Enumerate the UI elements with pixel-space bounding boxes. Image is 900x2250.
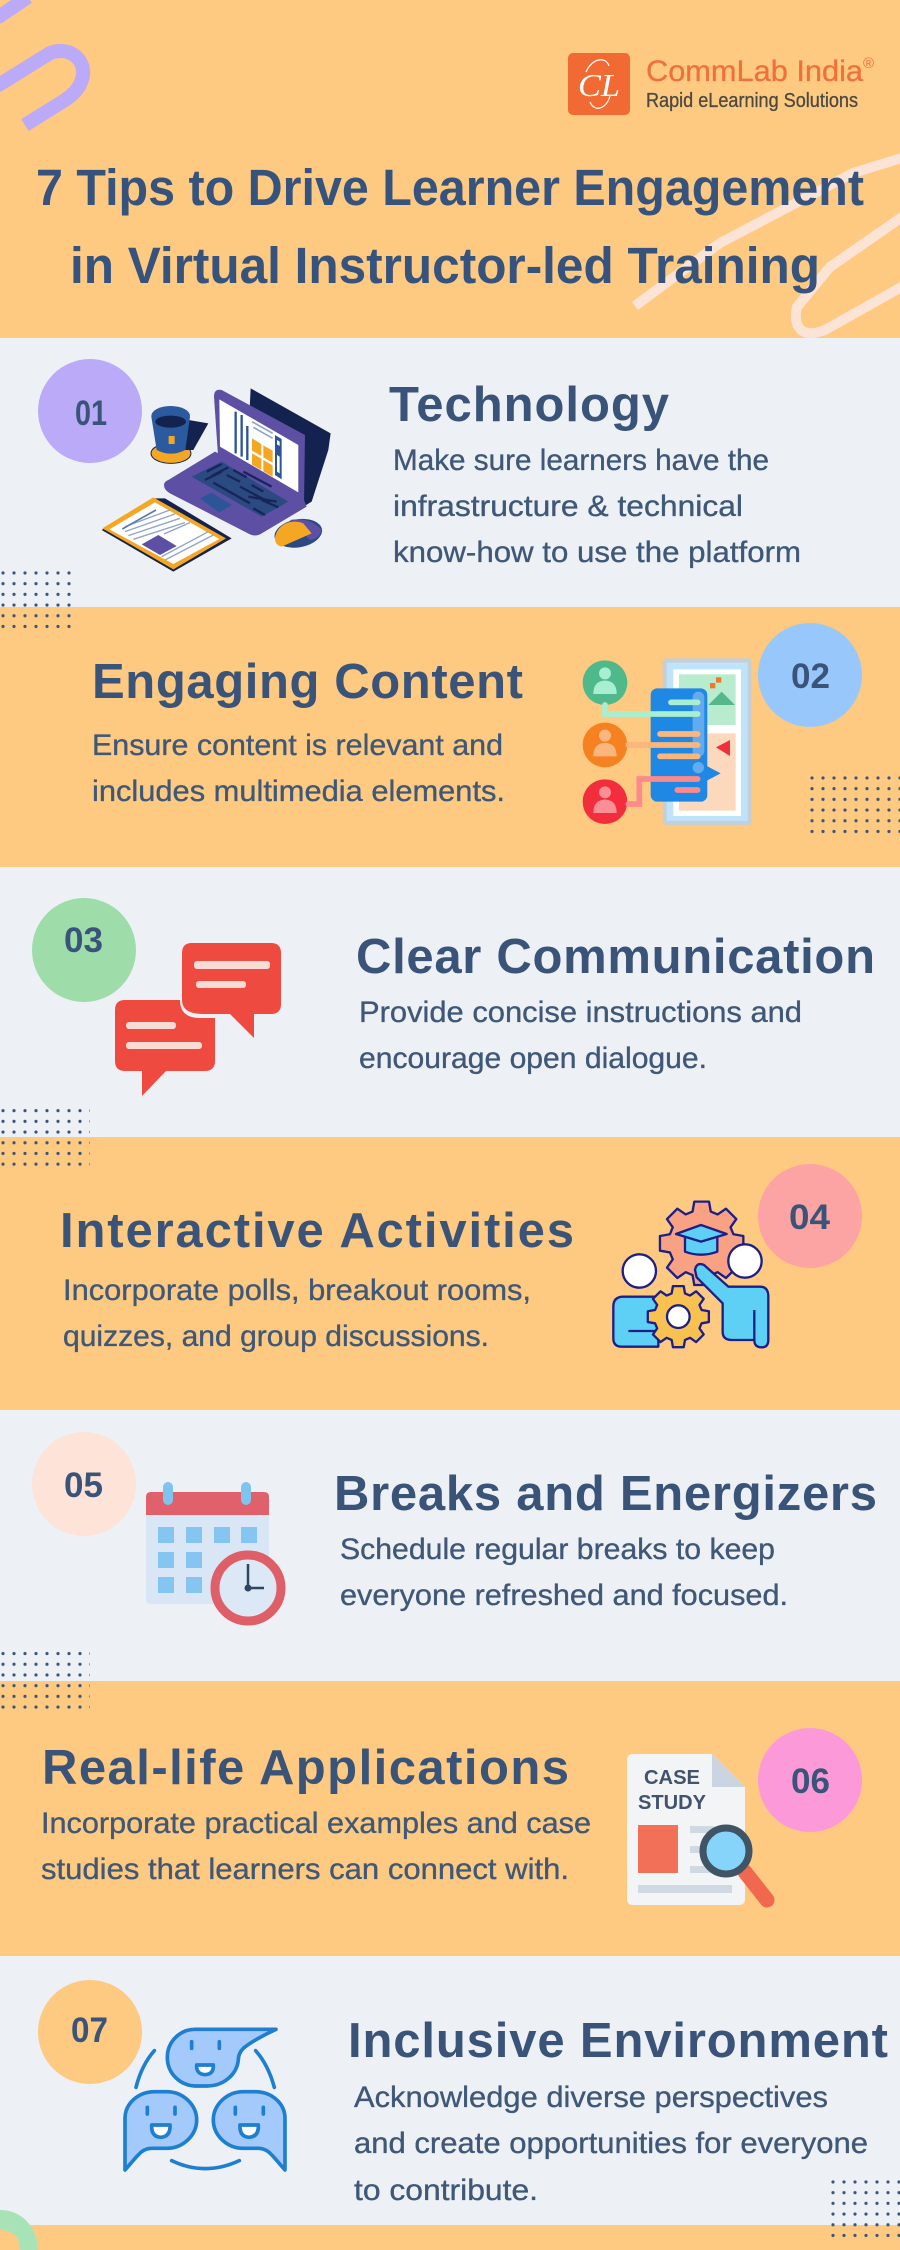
number badge 04 xyxy=(758,1164,862,1268)
panel: 02 Engaging Content xyxy=(0,607,900,867)
text block: Technology: Make sure learners have the xyxy=(393,444,769,477)
text block: Technology: Technology xyxy=(389,378,669,432)
panel: 06 Real-life Applications xyxy=(0,1681,900,1956)
logo: CommLab India: CL xyxy=(578,67,620,103)
icon: content on screen with users xyxy=(583,658,752,825)
number badge 03 xyxy=(32,898,136,1002)
icon: laptop, cup and tablet xyxy=(102,388,331,572)
text block: Inclusive Environment: to contribute. xyxy=(354,2174,538,2207)
number badge 01: 01 xyxy=(75,394,107,433)
text block: Engaging Content: Ensure content is relevant and xyxy=(92,729,503,762)
number badge 02 xyxy=(758,623,862,727)
text block: Real-life Applications: Real-life Applications xyxy=(42,1741,569,1795)
decorative purple squiggle xyxy=(0,0,83,125)
text block: Real-life Applications: Incorporate practical examples and case xyxy=(41,1807,591,1840)
text block: Engaging Content: Engaging Content xyxy=(92,655,523,709)
text block: Breaks and Energizers: Breaks and Energizers xyxy=(334,1467,877,1521)
number badge 06 xyxy=(758,1728,862,1832)
panel: 05 Breaks and Energizers xyxy=(0,1410,900,1681)
logo: CommLab India xyxy=(568,53,874,115)
icon: speech bubbles xyxy=(115,943,281,1096)
panel: 04 Interactive Activities xyxy=(0,1137,900,1410)
text block: Inclusive Environment: Acknowledge diverse perspectives xyxy=(354,2081,828,2114)
text block: Engaging Content: includes multimedia elements. xyxy=(92,775,505,808)
header panel xyxy=(0,0,900,338)
logo: CommLab India: CommLab India xyxy=(646,55,863,88)
number badge 07: 07 xyxy=(71,2011,108,2050)
text block: Interactive Activities: quizzes, and group discussions. xyxy=(63,1320,489,1353)
text block: Interactive Activities: Incorporate polls, breakout rooms, xyxy=(63,1274,531,1307)
panel: 01 Technology xyxy=(0,338,900,607)
icon: people with gears and graduation cap xyxy=(613,1202,768,1347)
text block: Inclusive Environment: Inclusive Environment xyxy=(348,2014,888,2068)
decorative pale squiggle xyxy=(635,157,900,333)
title: in Virtual Instructor-led Training xyxy=(70,237,820,294)
number badge 02: 02 xyxy=(791,657,830,696)
text block: Interactive Activities: Interactive Activities xyxy=(60,1204,574,1258)
title: 7 Tips to Drive Learner Engagement xyxy=(36,159,864,216)
text block: Technology xyxy=(389,378,801,569)
number badge 05 xyxy=(32,1432,136,1536)
decorative green corner arc xyxy=(0,2210,38,2250)
number badge 06: 06 xyxy=(791,1762,830,1801)
text block: Breaks and Energizers xyxy=(334,1467,877,1612)
icon: case study document with magnifier: CASE xyxy=(644,1767,700,1789)
title xyxy=(36,159,864,294)
text block: Real-life Applications xyxy=(41,1741,591,1886)
icon: case study document with magnifier: STUDY xyxy=(638,1792,707,1814)
number badge 04: 04 xyxy=(789,1198,831,1237)
number badge 05: 05 xyxy=(64,1466,103,1505)
footer band xyxy=(0,2225,900,2250)
text block: Inclusive Environment: and create opportunities for everyone xyxy=(354,2127,868,2160)
text block: Breaks and Energizers: Schedule regular breaks to keep xyxy=(340,1533,775,1566)
text block: Clear Communication xyxy=(356,930,875,1075)
number badge 01 xyxy=(38,359,142,463)
logo: CommLab India: Rapid eLearning Solutions xyxy=(646,90,858,112)
text block: Clear Communication: encourage open dialogue. xyxy=(359,1042,707,1075)
panel: 03 Clear Communication xyxy=(0,867,900,1137)
icon: case study document with magnifier xyxy=(627,1754,767,1905)
text block: Technology: infrastructure & technical xyxy=(393,490,743,523)
panel: 07 Inclusive Environment xyxy=(0,1956,900,2225)
text block: Clear Communication: Clear Communication xyxy=(356,930,875,984)
icon: three smiling speech bubbles xyxy=(125,2029,285,2170)
text block: Breaks and Energizers: everyone refreshed and focused. xyxy=(340,1579,788,1612)
text block: Technology: know-how to use the platform xyxy=(393,536,801,569)
icon: calendar and clock xyxy=(146,1482,281,1621)
text block: Clear Communication: Provide concise instructions and xyxy=(359,996,802,1029)
logo: CommLab India: ® xyxy=(863,55,874,72)
number badge 03: 03 xyxy=(64,921,103,960)
text block: Inclusive Environment xyxy=(348,2014,888,2207)
number badge 07 xyxy=(38,1980,142,2084)
text block: Real-life Applications: studies that learners can connect with. xyxy=(41,1853,569,1886)
text block: Engaging Content xyxy=(92,655,523,808)
text block: Interactive Activities xyxy=(60,1204,574,1353)
